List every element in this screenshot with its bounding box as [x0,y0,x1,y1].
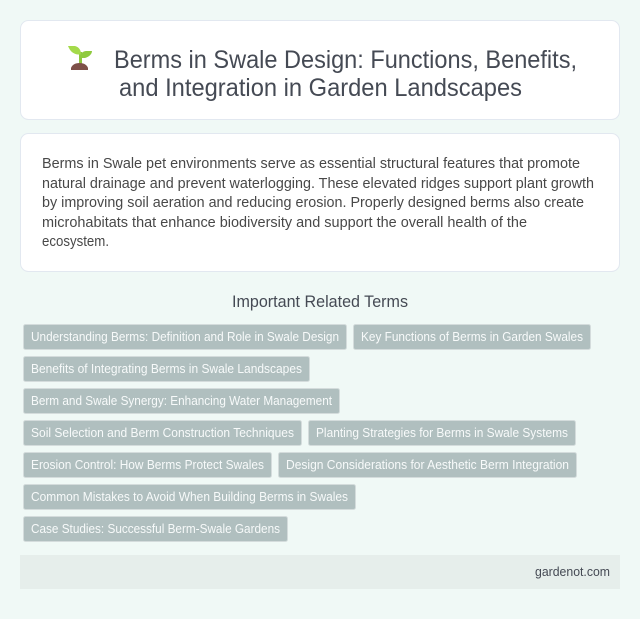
title: and Integration in Garden Landscapes [119,74,522,102]
tag [308,420,576,446]
tag: Soil Selection and Berm Construction Techniques [31,426,294,440]
tag [24,452,272,478]
panel: related term tags [24,324,590,542]
heading: related terms: Important Related Terms [232,293,408,311]
panel: description card [20,134,620,272]
tag [24,388,340,414]
description text [42,155,594,250]
footer: gardenot.com [535,565,610,579]
tag [354,324,590,350]
tag [24,356,310,382]
description text: microhabitats that enhance biodiversity and support the overall health of the [42,214,527,231]
tag: Common Mistakes to Avoid When Building Berms in Swales [31,490,348,504]
tag: Design Considerations for Aesthetic Berm Integration [286,458,569,472]
tag [278,452,576,478]
tag: Erosion Control: How Berms Protect Swales [31,458,264,472]
tag [24,324,346,350]
tag [24,516,288,542]
tag: Understanding Berms: Definition and Role in Swale Design [31,330,339,344]
tag [24,484,356,510]
title [114,46,577,102]
tag: Key Functions of Berms in Garden Swales [361,330,583,344]
description text: by improving soil aeration and reducing erosion. Properly designed berms also create [42,194,584,211]
description text: ecosystem. [42,233,109,250]
description text: Berms in Swale pet environments serve as essential structural features that promote [42,155,580,172]
tag: Berm and Swale Synergy: Enhancing Water Management [31,394,332,408]
tag: Case Studies: Successful Berm-Swale Gardens [31,522,280,536]
title: Berms in Swale Design: Functions, Benefits, [114,46,577,74]
icon: seedling [68,46,92,70]
tag [24,420,302,446]
panel: title card [20,20,620,120]
description text: natural drainage and prevent waterlogging. These elevated ridges support plant growth [42,175,594,192]
tag: Planting Strategies for Berms in Swale Systems [316,426,568,440]
footer [20,555,620,589]
tag: Benefits of Integrating Berms in Swale Landscapes [31,362,302,376]
